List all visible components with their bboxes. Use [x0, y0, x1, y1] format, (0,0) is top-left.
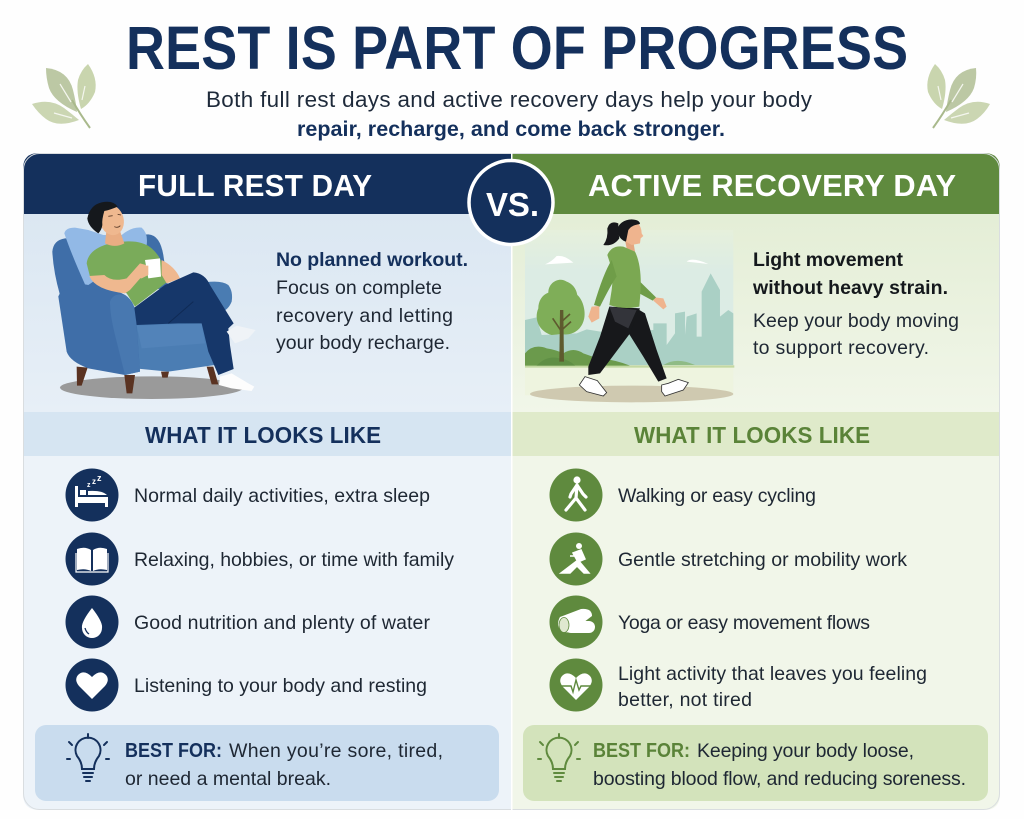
- icon: right leaf sprig: [927, 64, 990, 128]
- list item: sleep: z: [87, 482, 91, 489]
- heading: what it looks like (left): WHAT IT LOOKS LIKE: [145, 422, 381, 448]
- text: full rest description: [276, 249, 468, 354]
- list item: water drop: Good nutrition and plenty of water: [134, 612, 430, 634]
- text: active recovery description: without heavy strain.: [752, 277, 948, 299]
- list item: yoga mat: Yoga or easy movement flows: [618, 612, 870, 634]
- callout: best for (right): boosting blood flow, and reducing soreness.: [593, 768, 966, 790]
- panel: active recovery day: [512, 153, 1000, 810]
- callout: best for (left): [35, 725, 499, 801]
- subtitle: [206, 87, 813, 141]
- heading: what it looks like (right): [512, 412, 1000, 456]
- list item: book: [66, 532, 454, 586]
- list item: sleep: z: [97, 473, 102, 483]
- list item: stretching: [550, 532, 907, 586]
- list item: heart: [66, 658, 427, 712]
- left header: [23, 153, 512, 214]
- callout: best for (right): BEST FOR:: [593, 740, 690, 762]
- subtitle: repair, recharge, and come back stronger.: [297, 117, 725, 141]
- panel: full rest day: [23, 153, 512, 810]
- list item: sleep: Normal daily activities, extra sleep: [134, 485, 430, 507]
- list item: yoga mat: [550, 596, 870, 648]
- text: active recovery description: Light movement: [753, 249, 904, 271]
- heading: what it looks like (right): WHAT IT LOOKS LIKE: [634, 422, 870, 448]
- illustration: woman walking in park: [525, 219, 734, 402]
- list item: walking: Walking or easy cycling: [618, 485, 816, 507]
- callout: best for (left): or need a mental break.: [125, 768, 331, 790]
- list item: heartbeat: [550, 658, 927, 712]
- list item: water drop: [66, 596, 430, 648]
- callout: best for (left): When you’re sore, tired,: [229, 740, 443, 762]
- list item: stretching: Gentle stretching or mobility work: [618, 549, 907, 571]
- title: REST IS PART OF PROGRESS: [126, 15, 908, 83]
- list item: sleep: [66, 468, 430, 522]
- heading: what it looks like (left): [24, 412, 512, 456]
- text: active recovery description: [752, 249, 959, 359]
- list item: heart: Listening to your body and resting: [134, 675, 427, 697]
- badge: VS.: [469, 160, 553, 244]
- text: active recovery description: Keep your body moving: [753, 310, 959, 332]
- left header: FULL REST DAY: [138, 169, 372, 203]
- badge: VS.: VS.: [486, 186, 539, 223]
- list item: sleep: z: [92, 477, 96, 486]
- text: full rest description: No planned workout.: [276, 249, 468, 271]
- text: active recovery description: to support recovery.: [753, 337, 929, 359]
- text: full rest description: recovery and letting: [276, 305, 453, 327]
- callout: best for (right): [523, 725, 988, 801]
- callout: best for (right): Keeping your body loose,: [697, 740, 914, 762]
- illustration: person resting in armchair: [52, 202, 256, 399]
- list item: heartbeat: better, not tired: [618, 689, 752, 711]
- text: full rest description: your body recharge.: [276, 332, 450, 354]
- subtitle: Both full rest days and active recovery days help your body: [206, 87, 813, 112]
- list item: book: Relaxing, hobbies, or time with family: [134, 549, 454, 571]
- icon: left leaf sprig: [32, 64, 96, 128]
- right header: [512, 153, 1000, 214]
- callout: best for (left): BEST FOR:: [125, 740, 222, 762]
- right header: ACTIVE RECOVERY DAY: [588, 168, 956, 203]
- list item: walking: [550, 468, 816, 522]
- text: full rest description: Focus on complete: [276, 277, 442, 299]
- list item: heartbeat: Light activity that leaves you feeling: [618, 663, 927, 685]
